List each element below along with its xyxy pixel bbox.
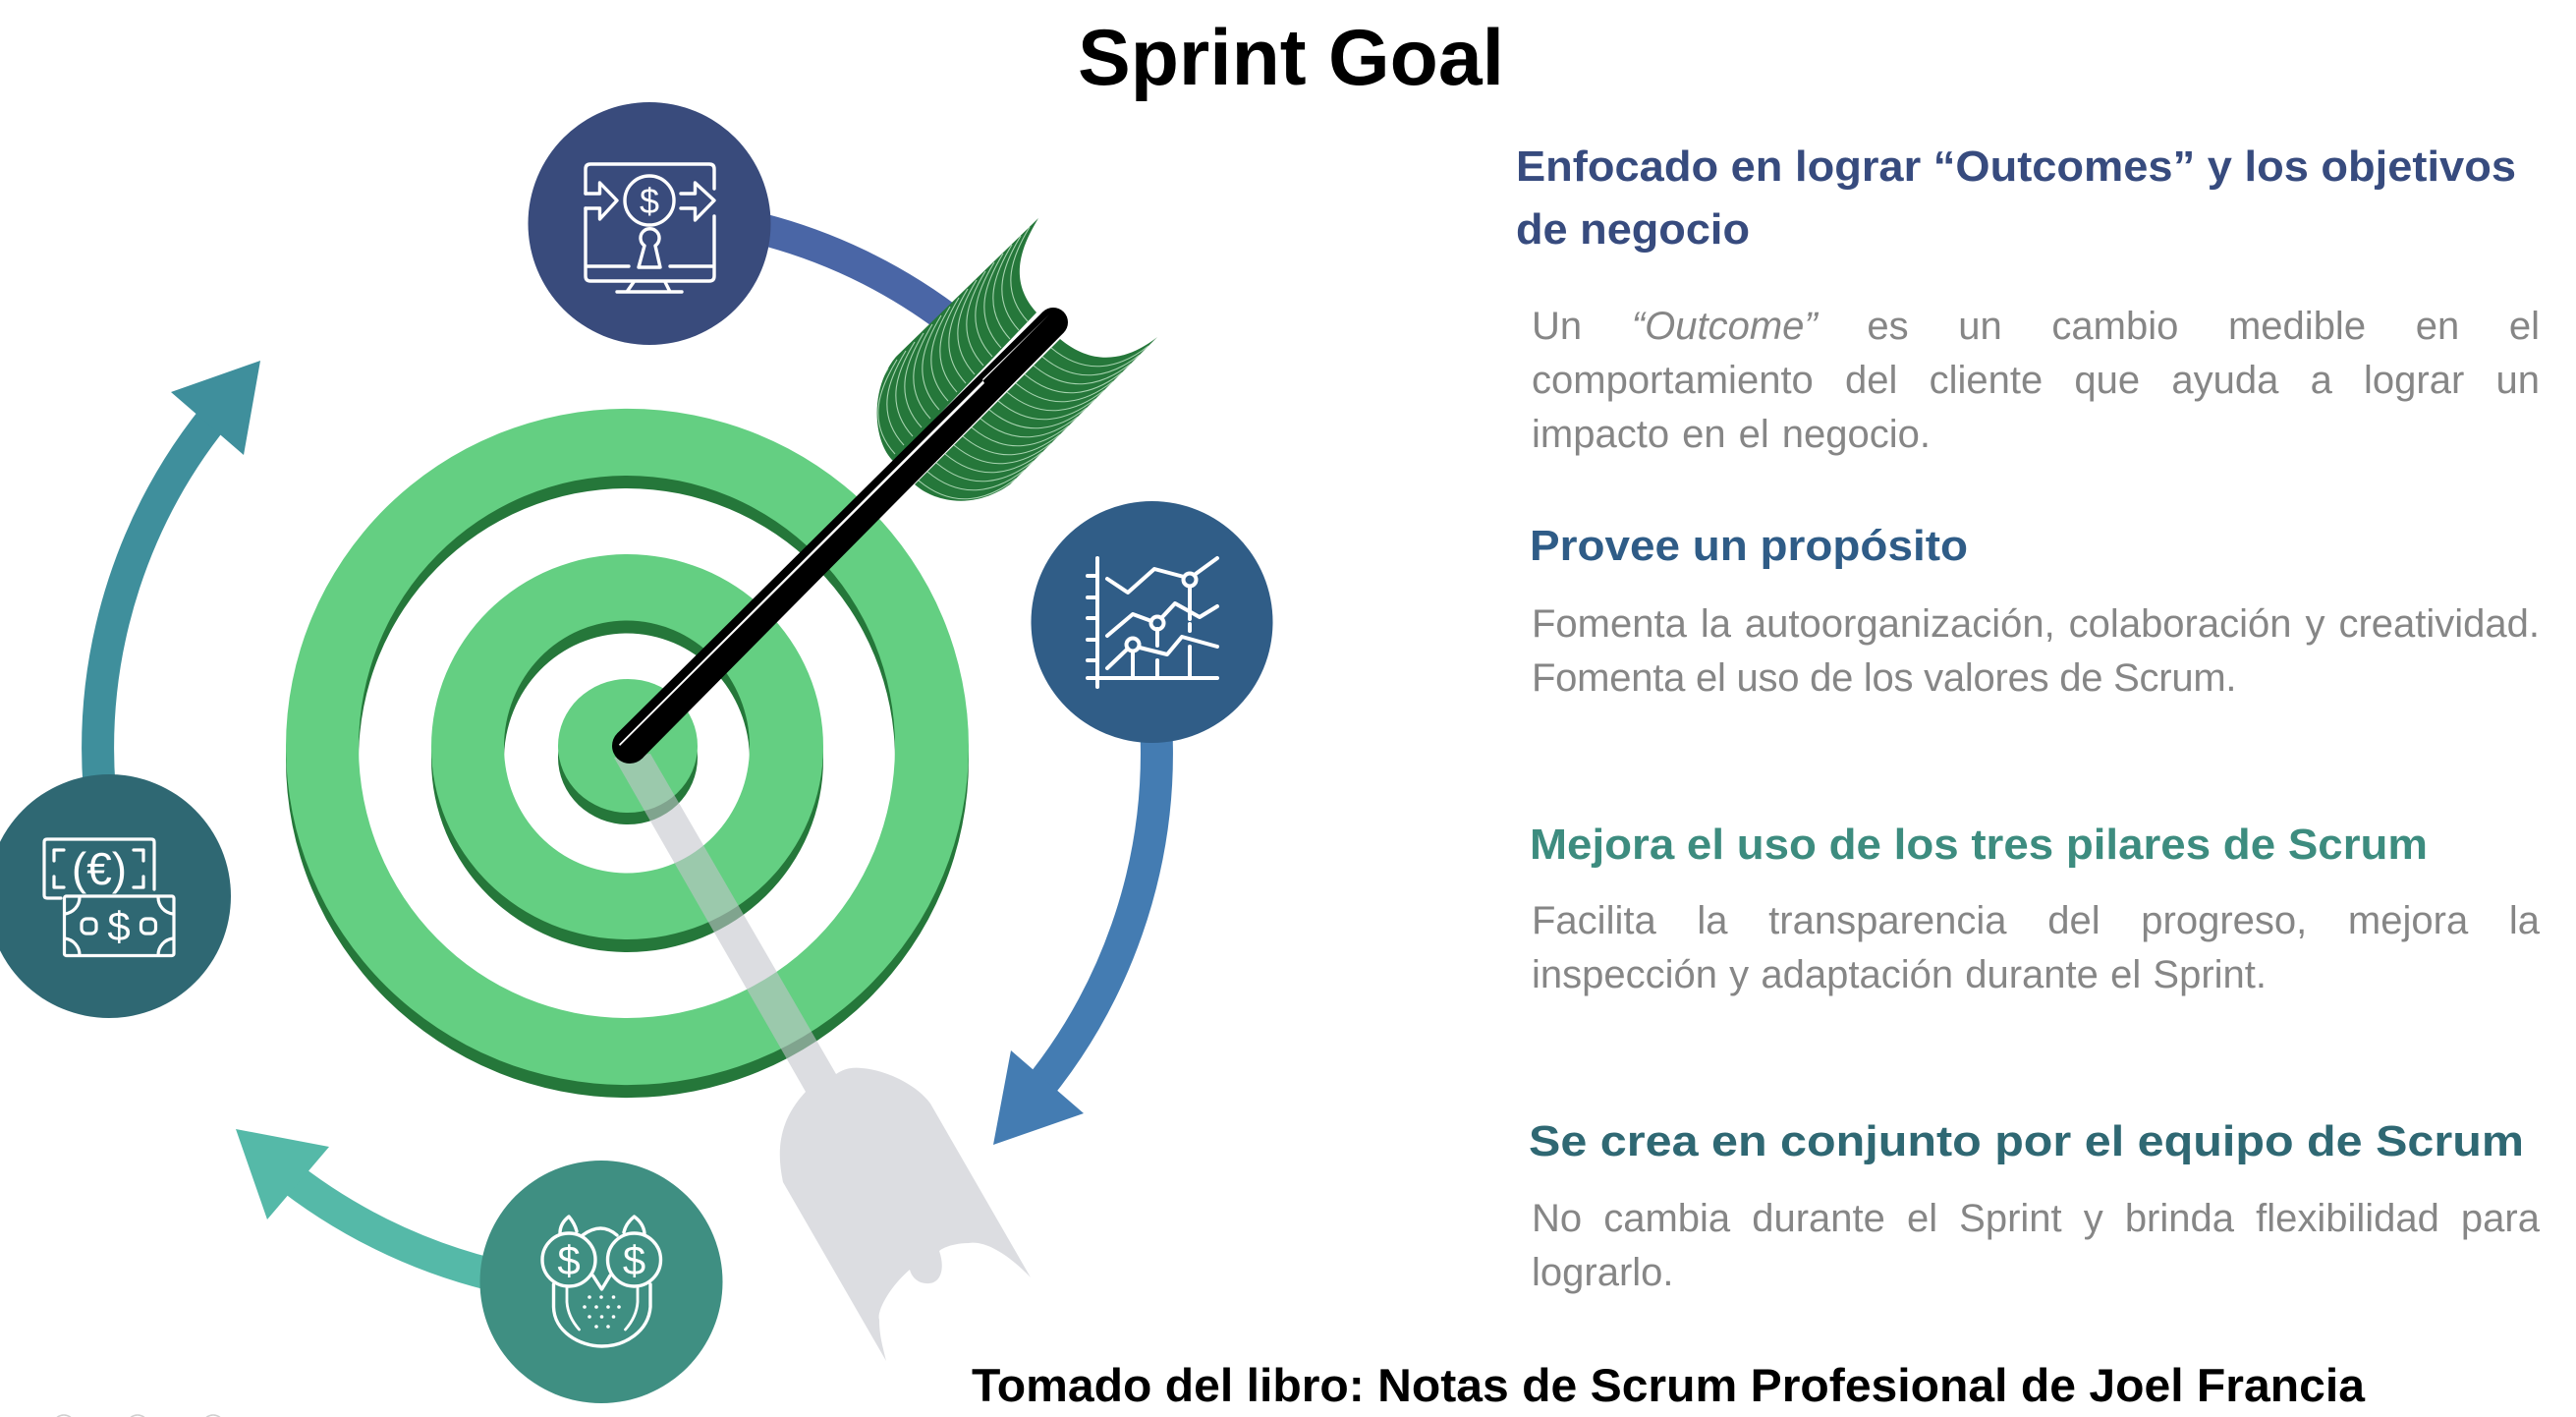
icon circle: owl: $ [623, 1237, 645, 1283]
icon circle: banknotes: $ [107, 903, 131, 949]
source credit: Tomado del libro: Notas de Scrum Profesional de Joel Francia [972, 1359, 2366, 1411]
text block: purpose [1532, 602, 2540, 700]
arrow: shaft [612, 308, 1068, 764]
text block: team: No cambia durante el Sprint y brinda flexibilidad para [1532, 1197, 2540, 1240]
arrow: bottom teal [236, 1129, 491, 1275]
heading: pillars: Mejora el uso de los tres pilares de Scrum [1530, 821, 2428, 869]
arrow: fletching [869, 218, 1157, 508]
arrow: right blue [993, 732, 1156, 1145]
text block: purpose: Fomenta el uso de los valores de Scrum. [1532, 656, 2236, 700]
arrow: left teal [98, 361, 260, 786]
text block: outcomes [1532, 305, 2540, 456]
text block: outcomes: comportamiento del cliente que ayuda a lograr un [1532, 359, 2540, 402]
text block: outcomes: impacto en el negocio. [1532, 413, 1931, 456]
arc: top connector [761, 229, 958, 326]
panel: team [1529, 1117, 2540, 1294]
target: concentric rings [286, 409, 969, 1098]
icon circle: monitor with dollar [529, 102, 770, 345]
icon circle: owl [479, 1161, 723, 1403]
pagination dots cropped at edge [53, 1415, 224, 1417]
heading: purpose: Provee un propósito [1530, 522, 1968, 570]
icon circle: monitor with dollar: $ [640, 181, 659, 221]
arrow shadow [614, 754, 1031, 1361]
heading: outcomes [1516, 142, 2516, 254]
panel: purpose [1530, 522, 2540, 700]
text block: team: lograrlo. [1532, 1251, 1674, 1294]
icon circle: owl: $ [557, 1237, 581, 1283]
diagram: target with arrow and cycle [0, 102, 1273, 1417]
text block: pillars [1532, 899, 2540, 996]
title: Sprint Goal [1078, 14, 1504, 102]
text block: purpose: Fomenta la autoorganización, colaboración y creatividad. [1532, 602, 2540, 646]
icon circle: banknotes: (€) [72, 843, 127, 894]
icon circle: banknotes [0, 774, 231, 1018]
text block: team [1532, 1197, 2540, 1294]
panel: outcomes [1516, 142, 2540, 456]
heading: outcomes: Enfocado en lograr “Outcomes” y los objetivos [1516, 142, 2516, 191]
heading: outcomes: de negocio [1516, 205, 1750, 254]
heading: team: Se crea en conjunto por el equipo de Scrum [1529, 1117, 2524, 1165]
text block: outcomes: Un “Outcome” es un cambio medible en el [1532, 305, 2540, 348]
panel: pillars [1530, 821, 2540, 996]
text block: pillars: inspección y adaptación durante el Sprint. [1532, 953, 2267, 996]
text block: pillars: Facilita la transparencia del progreso, mejora la [1532, 899, 2540, 942]
icon circle: line chart [1032, 501, 1273, 743]
